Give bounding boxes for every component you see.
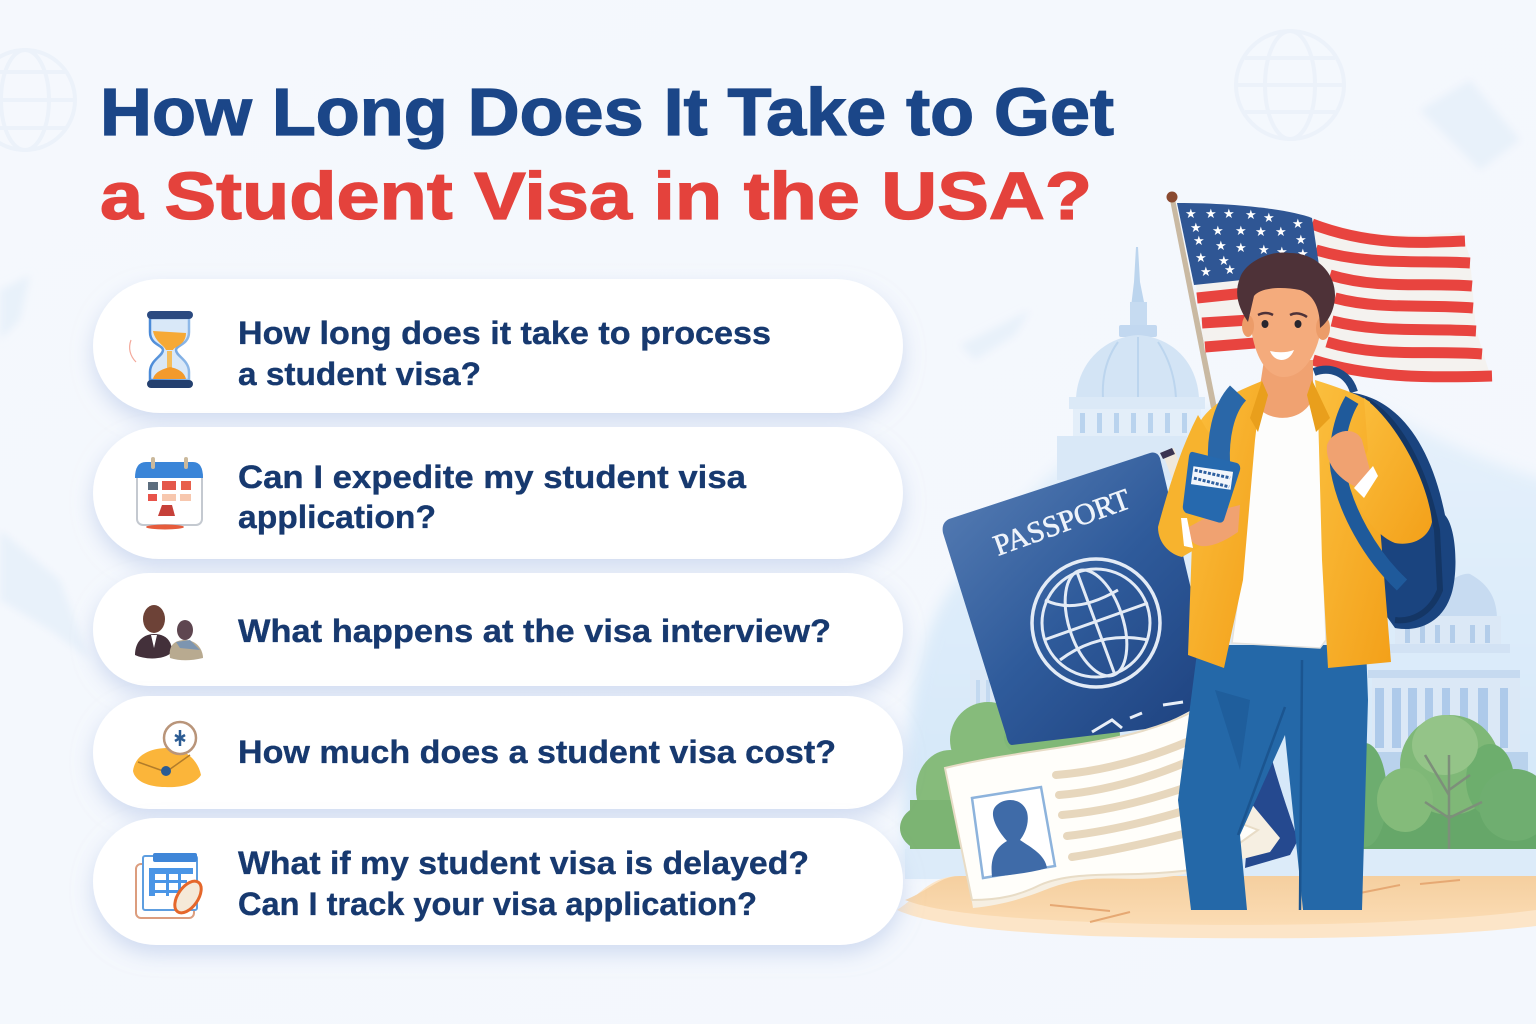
text: What happens at the visa interview? xyxy=(238,613,831,649)
text: application? xyxy=(238,499,436,535)
title highlight line: a Student Visa in the USA? xyxy=(100,159,1092,234)
visa document xyxy=(945,708,1280,908)
flag stars: ★ xyxy=(1193,234,1205,249)
icon: calendar xyxy=(135,457,203,530)
text xyxy=(238,459,746,535)
text xyxy=(238,845,809,922)
left sleeve xyxy=(1158,415,1213,557)
capitol building, left ruin xyxy=(970,670,1006,710)
flag pole xyxy=(1166,192,1217,408)
visa photo xyxy=(972,787,1055,878)
dark lower leg behind xyxy=(1245,745,1298,868)
title: How Long Does It Take to Get xyxy=(100,75,1114,150)
flag stars: ★ xyxy=(1205,207,1217,222)
flag stars: ★ xyxy=(1200,265,1212,280)
flag stars: ★ xyxy=(1185,207,1197,222)
text: How long does it take to process xyxy=(238,315,771,351)
head xyxy=(1237,253,1335,377)
left hand xyxy=(1187,505,1240,546)
flag stars: ★ xyxy=(1195,251,1207,266)
flag stars: ★ xyxy=(1292,217,1304,232)
passport globe xyxy=(1032,559,1160,687)
jeans xyxy=(1178,645,1368,910)
text: Can I track your visa application? xyxy=(238,886,757,922)
text: a student visa? xyxy=(238,356,481,392)
icon: interview people xyxy=(135,605,203,660)
icon: document and magnifier xyxy=(136,853,207,918)
text xyxy=(238,315,771,392)
backpack xyxy=(1314,370,1455,629)
ground platform xyxy=(897,876,1536,938)
flag stars: ★ xyxy=(1223,207,1235,222)
flag stars: ★ xyxy=(1263,211,1275,226)
held card xyxy=(1183,452,1240,523)
flag stars: ★ xyxy=(1218,254,1230,269)
t-shirt xyxy=(1232,392,1326,648)
text: How much does a student visa cost? xyxy=(238,734,836,770)
flag xyxy=(1166,192,1492,408)
icon: purse and coin xyxy=(133,722,201,787)
visa text lines xyxy=(1056,742,1187,857)
right hand xyxy=(1327,431,1378,498)
flag canton xyxy=(1177,203,1320,285)
cuff xyxy=(1181,518,1193,548)
passport label: PASSPORT xyxy=(989,483,1135,563)
student figure xyxy=(1158,253,1455,910)
card 5 xyxy=(93,818,903,945)
flag stars: ★ xyxy=(1235,224,1247,239)
bushes left xyxy=(900,702,1120,852)
passport xyxy=(943,453,1222,745)
backpack straps xyxy=(1219,393,1402,585)
flag stars: ★ xyxy=(1255,225,1267,240)
hair xyxy=(1237,253,1335,328)
card 4 xyxy=(93,696,903,809)
card 1 xyxy=(93,279,903,413)
background haze behind illustration xyxy=(904,393,1536,870)
rolled document behind passport xyxy=(1160,448,1192,510)
background decoration: faint globes and splashes xyxy=(0,31,1520,660)
flag stars: ★ xyxy=(1295,233,1307,248)
flag stars: ★ xyxy=(1212,224,1224,239)
flag stars: ★ xyxy=(1245,208,1257,223)
jacket xyxy=(1158,380,1391,668)
visa photo silhouette xyxy=(992,800,1047,877)
capitol building, back xyxy=(1057,247,1205,480)
neck xyxy=(1257,360,1313,418)
flag stars: ★ xyxy=(1258,243,1270,258)
title xyxy=(100,75,1114,234)
flag stars: ★ xyxy=(1224,263,1236,278)
flag stars: ★ xyxy=(1190,221,1202,236)
flag stars: ★ xyxy=(1215,239,1227,254)
smile xyxy=(1270,350,1294,360)
flag stars: ★ xyxy=(1235,241,1247,256)
flag stars xyxy=(1185,207,1309,280)
tree right xyxy=(1343,715,1536,849)
card 2 xyxy=(93,427,903,559)
right sleeve xyxy=(1352,398,1432,544)
text: Can I expedite my student visa xyxy=(238,459,746,495)
pavement strip xyxy=(905,849,1536,879)
text: What if my student visa is delayed? xyxy=(238,845,809,881)
flag stars: ★ xyxy=(1275,225,1287,240)
capitol building, right xyxy=(1368,574,1528,812)
eyes xyxy=(1258,313,1307,317)
icon: hourglass xyxy=(130,311,193,388)
flag stripes xyxy=(1177,203,1492,381)
card 3 xyxy=(93,573,903,686)
flag stars: ★ xyxy=(1297,247,1309,262)
flag stars: ★ xyxy=(1276,245,1288,260)
